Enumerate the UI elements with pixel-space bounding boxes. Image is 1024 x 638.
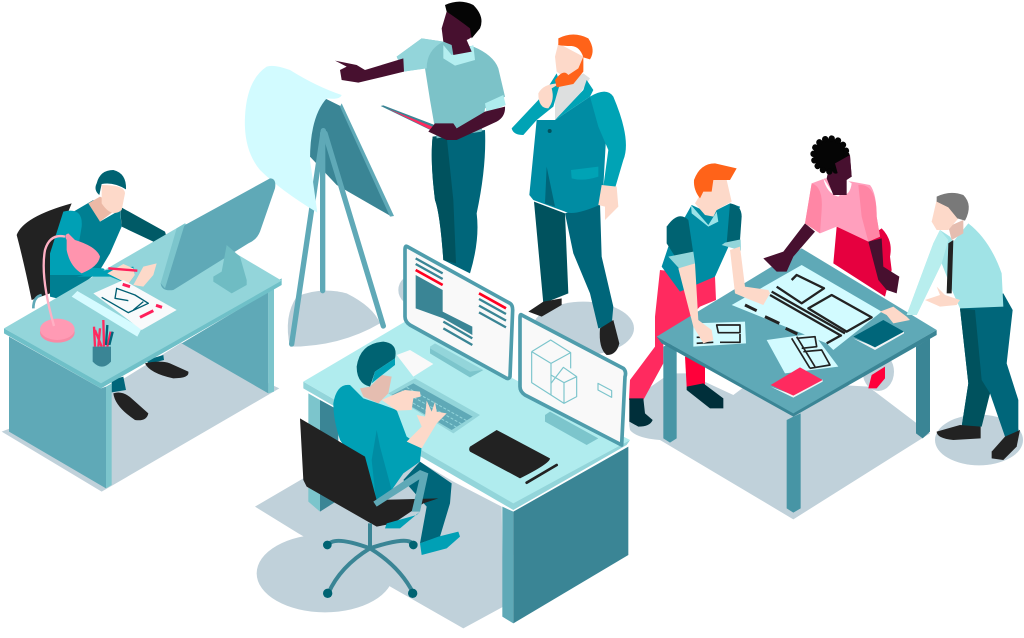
sheet of plans bbox=[93, 280, 177, 330]
arms and hands bbox=[382, 390, 421, 411]
keyboard bbox=[388, 378, 480, 433]
monitor bbox=[161, 178, 275, 290]
shirt bbox=[907, 223, 1003, 315]
scarf bbox=[555, 73, 590, 120]
standing man pointing bbox=[335, 2, 506, 273]
easel with flipchart bbox=[245, 66, 394, 344]
head bbox=[695, 177, 732, 217]
collar and cuff bbox=[443, 45, 475, 66]
roll of plans bbox=[72, 291, 142, 337]
monitor two with 3D boxes bbox=[520, 315, 626, 445]
feet bbox=[112, 377, 126, 392]
chair bbox=[17, 203, 72, 300]
woman upper body bbox=[763, 138, 899, 293]
tie bbox=[947, 240, 953, 293]
table top bbox=[657, 330, 937, 417]
lamp bbox=[40, 233, 100, 343]
head bbox=[948, 220, 963, 240]
desk shadow bbox=[2, 343, 279, 492]
head bbox=[442, 12, 475, 55]
desk legs and side panel bbox=[308, 393, 320, 512]
right meeting table with three people bbox=[629, 138, 1020, 513]
flipchart paper bbox=[245, 66, 342, 213]
large blueprint bbox=[732, 265, 882, 350]
man with orange hair: legs bbox=[629, 270, 723, 427]
hair bbox=[357, 342, 396, 387]
standing man with red beard bbox=[512, 34, 626, 355]
leg and shoe bbox=[403, 462, 452, 543]
head and beard bbox=[555, 43, 583, 80]
sleeves bbox=[512, 73, 560, 135]
floor shadows: easel and standing men bbox=[288, 273, 634, 355]
head bbox=[88, 197, 120, 222]
pencil cup bbox=[93, 320, 113, 367]
monitor one bbox=[405, 246, 513, 379]
man with orange hair: upper body bbox=[662, 163, 770, 343]
trousers bbox=[432, 130, 485, 273]
woman skirt bbox=[833, 227, 892, 297]
desk legs bbox=[182, 292, 268, 393]
trousers and shoes bbox=[960, 293, 1018, 437]
seated man from behind bbox=[333, 342, 460, 555]
hands bbox=[538, 83, 560, 108]
trousers and shoes bbox=[534, 202, 568, 303]
man with grey hair bbox=[880, 193, 1020, 460]
jacket bbox=[529, 93, 607, 213]
floor shadow: central desk bbox=[255, 440, 503, 628]
central desk with designer bbox=[300, 246, 630, 623]
table legs bbox=[663, 343, 677, 443]
neck bbox=[360, 375, 392, 403]
shirt bbox=[397, 38, 505, 138]
hands and pen bbox=[50, 267, 135, 284]
small plan sheets bbox=[693, 322, 838, 373]
left desk with seated designer bbox=[2, 170, 282, 492]
torso bbox=[333, 385, 422, 507]
easel board bbox=[310, 98, 392, 217]
books bbox=[771, 320, 904, 398]
paper bbox=[397, 350, 433, 377]
arms bbox=[678, 263, 713, 343]
tablet bbox=[381, 105, 443, 131]
hands bbox=[925, 287, 960, 307]
desk top bbox=[4, 278, 282, 388]
seated man torso bbox=[50, 200, 122, 300]
desk top bbox=[303, 382, 630, 510]
arms bbox=[335, 58, 404, 83]
office chair bbox=[300, 418, 438, 598]
easel legs bbox=[292, 131, 383, 344]
graphic tablet and pen bbox=[469, 430, 557, 483]
floor shadow: right table bbox=[629, 352, 1023, 519]
